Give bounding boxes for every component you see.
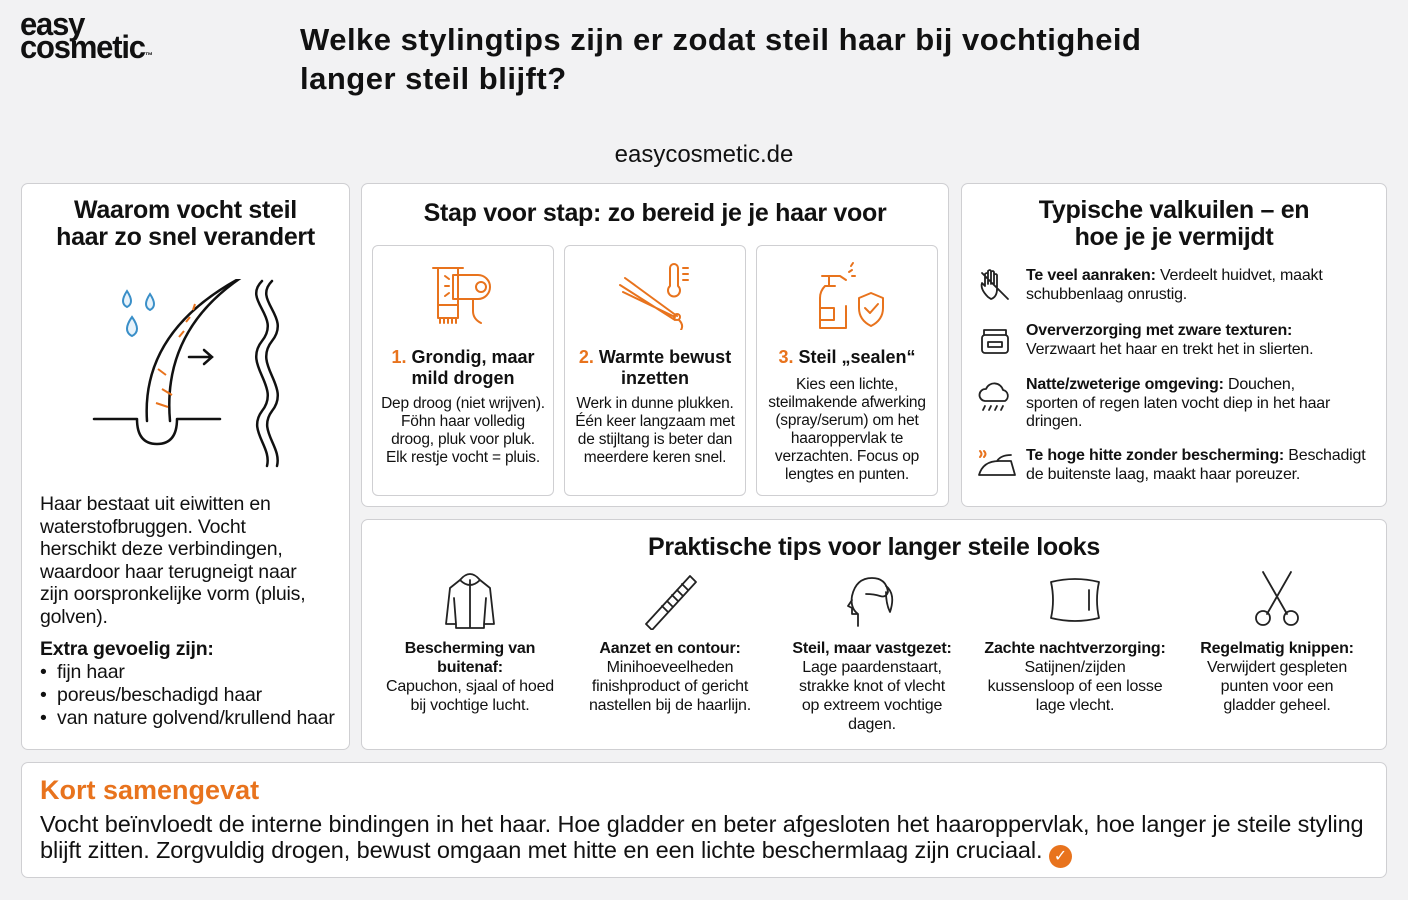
explanation text: golven). xyxy=(40,606,108,628)
icon: pillow xyxy=(1050,578,1100,622)
heading: Praktische tips voor langer steile looks xyxy=(648,533,1100,561)
step 1 text: Föhn haar volledig xyxy=(401,413,525,430)
icon: jacket xyxy=(445,573,495,629)
explanation text: Haar bestaat uit eiwitten en xyxy=(40,493,271,515)
pitfall 4: de buitenste laag, maakt haar poreuzer. xyxy=(1026,466,1300,482)
step 2 text: meerdere keren snel. xyxy=(584,449,726,466)
icon: spray bottle with shield xyxy=(819,262,884,329)
tip 3: Steil, maar vastgezet: xyxy=(792,640,952,657)
explanation text: waardoor haar terugneigt naar xyxy=(40,560,297,582)
step 1 text: Dep droog (niet wrijven). xyxy=(381,395,545,412)
step 2 text: de stijltang is beter dan xyxy=(578,431,732,448)
panel: why moisture xyxy=(21,183,350,750)
step 2 title xyxy=(579,347,732,388)
tip 5: punten voor een xyxy=(1221,678,1333,695)
icon: comb xyxy=(645,575,697,630)
pitfall 4: Te hoge hitte zonder bescherming: Beschadigt xyxy=(1026,447,1365,464)
tip 3: Lage paardenstaart, xyxy=(802,659,942,676)
pitfall 3 xyxy=(978,376,1330,430)
step 1 text xyxy=(381,395,545,466)
icon: iron xyxy=(978,450,1016,476)
step 3 text: Kies een lichte, xyxy=(796,376,898,393)
summary text xyxy=(40,811,1364,868)
card: step 3 xyxy=(756,245,938,496)
step 2 text: Één keer langzaam met xyxy=(575,413,735,430)
heading: hoe je je vermijdt xyxy=(1075,223,1273,251)
tip 2: Minihoeveelheden xyxy=(607,659,733,676)
title: langer steil blijft? xyxy=(300,61,567,96)
tip 1: buitenaf: xyxy=(437,659,503,676)
pitfall 2: Verzwaart het haar en trekt het in slierten. xyxy=(1026,340,1313,358)
sensitive list xyxy=(40,638,335,729)
tip 5: gladder geheel. xyxy=(1223,697,1331,714)
heading: haar zo snel verandert xyxy=(56,223,315,251)
summary text: Vocht beïnvloedt de interne bindingen in het haar. Hoe gladder en beter afgesloten het haaroppervlak, hoe langer je steile styling xyxy=(40,811,1364,837)
step 3 text: steilmakende afwerking xyxy=(768,394,926,411)
step 3 text xyxy=(768,376,926,483)
heading: Typische valkuilen – en xyxy=(1039,196,1309,224)
website url: easycosmetic.de xyxy=(615,141,793,168)
pitfall 3: sporten of regen laten vocht diep in het haar xyxy=(1026,394,1330,412)
title: Welke stylingtips zijn er zodat steil haar bij vochtigheid xyxy=(300,22,1141,57)
summary text: ✓ xyxy=(1054,848,1067,865)
step 3 text: haaroppervlak te xyxy=(791,430,903,447)
pitfall 1: schubbenlaag onrustig. xyxy=(1026,286,1187,302)
explanation text: waterstofbruggen. Vocht xyxy=(40,516,246,538)
panel: step by step xyxy=(361,183,949,507)
pitfall 1: Te veel aanraken: Verdeelt huidvet, maakt xyxy=(1026,267,1323,284)
heading xyxy=(56,196,315,251)
pitfall 2: Oververzorging met zware texturen: xyxy=(1026,322,1292,339)
step 3 text: (spray/serum) om het xyxy=(775,412,919,429)
tip 5: Verwijdert gespleten xyxy=(1207,659,1347,676)
tip 3: strakke knot of vlecht xyxy=(799,678,945,695)
step 1 title: 1. Grondig, maar xyxy=(391,347,535,367)
logo: cosmetic™ xyxy=(20,28,153,65)
tip 2: nastellen bij de haarlijn. xyxy=(589,697,751,714)
step 2 text xyxy=(575,395,735,466)
pitfall 2 xyxy=(981,322,1313,358)
step 3 text: lengtes en punten. xyxy=(785,466,909,483)
tip 3 xyxy=(792,577,952,733)
step 1 text: droog, pluk voor pluk. xyxy=(391,431,535,448)
summary text: blijft zitten. Zorgvuldig drogen, bewust omgaan met hitte en een lichte beschermlaag zijn cruciaal. xyxy=(40,837,1042,863)
explanation text: herschikt deze verbindingen, xyxy=(40,538,283,560)
icon: hair strand with moisture xyxy=(92,279,279,468)
logo: easy xyxy=(20,5,84,42)
tip 3: op extreem vochtige xyxy=(802,697,942,714)
step 2 text: Werk in dunne plukken. xyxy=(576,395,734,412)
pitfall 3: Natte/zweterige omgeving: Douchen, xyxy=(1026,376,1295,393)
sensitive list: Extra gevoelig zijn: xyxy=(40,638,214,660)
tip 5: Regelmatig knippen: xyxy=(1200,640,1354,657)
card: step 2 xyxy=(564,245,746,496)
tip 4: kussensloop of een losse xyxy=(988,678,1162,695)
panel: practical tips xyxy=(361,519,1387,750)
icon: ponytail head xyxy=(847,577,894,627)
step 1 title xyxy=(391,347,535,388)
tip 4: Zachte nachtverzorging: xyxy=(984,640,1166,657)
tip 2: Aanzet en contour: xyxy=(599,640,741,657)
card: step 1 xyxy=(372,245,554,496)
explanation text xyxy=(40,493,305,628)
panel: summary xyxy=(21,762,1387,878)
icon: straightener xyxy=(619,263,689,330)
panel: pitfalls xyxy=(961,183,1387,507)
pitfall 3: dringen. xyxy=(1026,413,1082,430)
tip 1: Bescherming van xyxy=(405,640,535,657)
tip 1 xyxy=(386,573,554,714)
tip 4 xyxy=(984,578,1166,714)
logo xyxy=(20,5,153,65)
heading: Waarom vocht steil xyxy=(74,196,297,224)
explanation text: zijn oorspronkelijke vorm (pluis, xyxy=(40,583,305,605)
tip 1: bij vochtige lucht. xyxy=(411,697,529,714)
title xyxy=(300,22,1141,96)
step 2 title: inzetten xyxy=(621,368,689,388)
icon: hand xyxy=(980,269,1009,300)
heading: Stap voor stap: zo bereid je je haar voor xyxy=(424,199,886,227)
icon: towel and dryer xyxy=(432,267,491,324)
icon: cloud rain xyxy=(978,382,1009,411)
sensitive list: • fijn haar xyxy=(40,661,125,683)
sensitive list: • van nature golvend/krullend haar xyxy=(40,707,335,729)
summary heading: Kort samengevat xyxy=(40,775,259,805)
icon: jar xyxy=(981,329,1009,354)
heading xyxy=(1039,196,1309,251)
tip 3: dagen. xyxy=(848,716,896,733)
step 3 text: verzachten. Focus op xyxy=(775,448,919,465)
tip 4: lage vlecht. xyxy=(1036,697,1114,714)
pitfall 4 xyxy=(978,447,1366,482)
tip 2 xyxy=(589,575,751,714)
step 3 title: 3. Steil „sealen“ xyxy=(778,347,916,367)
pitfall 1 xyxy=(980,267,1323,302)
sensitive list: • poreus/beschadigd haar xyxy=(40,684,262,706)
step 2 title: 2. Warmte bewust xyxy=(579,347,731,367)
icon: scissors xyxy=(1255,571,1299,626)
tip 5 xyxy=(1200,571,1354,714)
tip 2: finishproduct of gericht xyxy=(592,678,748,695)
tip 4: Satijnen/zijden xyxy=(1024,659,1126,676)
step 1 title: mild drogen xyxy=(412,368,514,388)
step 1 text: Elk restje vocht = pluis. xyxy=(386,449,540,466)
tip 1: Capuchon, sjaal of hoed xyxy=(386,678,554,695)
